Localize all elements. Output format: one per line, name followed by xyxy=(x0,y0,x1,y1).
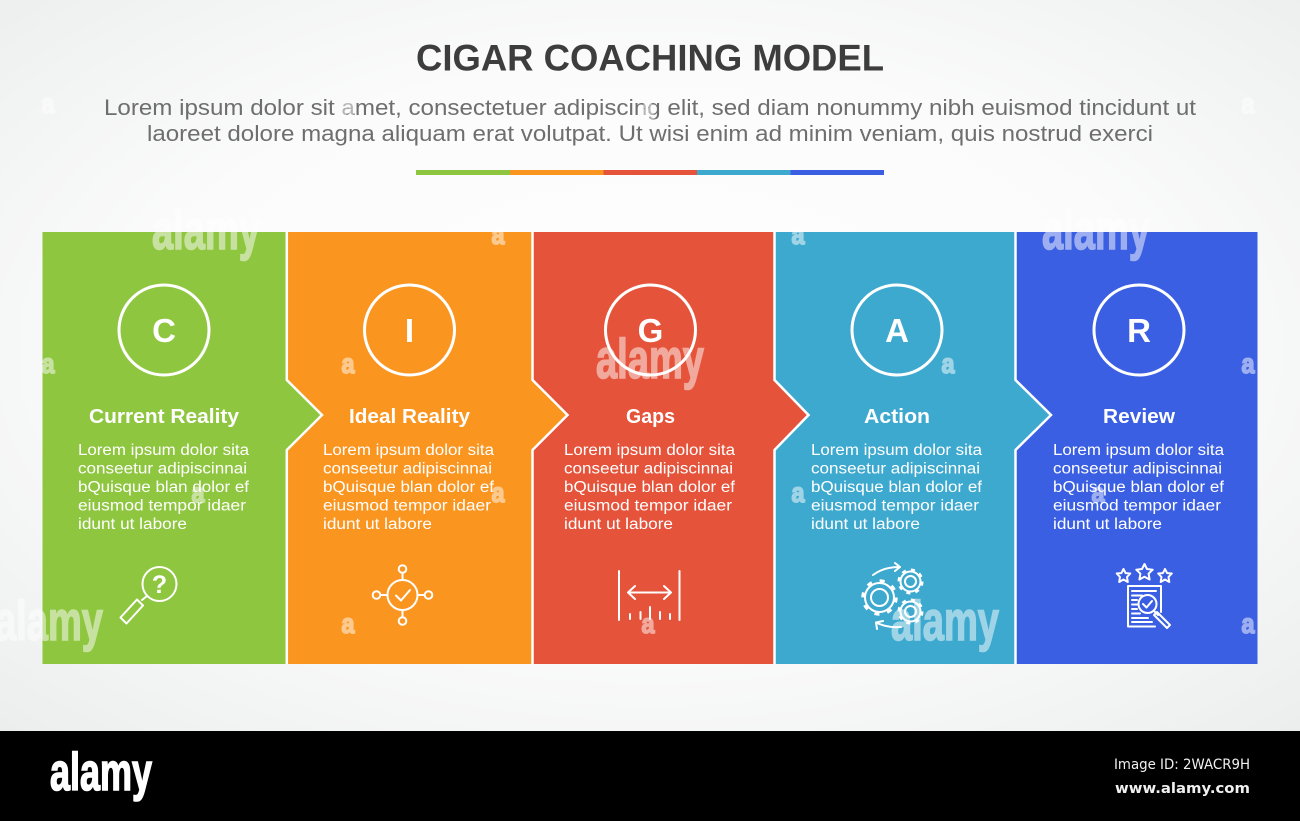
panel: ideal reality background xyxy=(287,232,568,664)
watermark: alamy overlays: alamy xyxy=(891,589,999,652)
letter R: R xyxy=(1127,312,1151,349)
panel content: review xyxy=(1053,285,1225,628)
body text: ideal reality: eiusmod tempor idaer xyxy=(323,498,491,514)
body text: review: Lorem ipsum dolor sita xyxy=(1053,442,1224,459)
letter I: I xyxy=(405,312,414,349)
heading: current reality: Current Reality xyxy=(89,406,240,428)
watermark: alamy overlays: a xyxy=(792,219,805,250)
watermark: alamy overlays: a xyxy=(642,608,655,639)
body text: action: Lorem ipsum dolor sita xyxy=(811,442,982,459)
footer logo: alamy xyxy=(50,743,152,802)
letter circle A xyxy=(852,285,942,375)
body text: current reality: bQuisque blan dolor ef xyxy=(78,479,250,496)
body text: current reality: conseetur adipiscinnai xyxy=(78,460,247,478)
title: CIGAR COACHING MODEL xyxy=(416,38,884,78)
heading: review: Review xyxy=(1103,406,1175,428)
panel: review background xyxy=(1016,232,1258,664)
watermark: alamy overlays: a xyxy=(42,88,55,119)
arrow outline: action xyxy=(1016,232,1051,664)
body text: ideal reality xyxy=(323,442,495,533)
subtitle text: Lorem ipsum dolor sit amet, consectetuer adipiscing elit, sed diam nonummy nibh euismod tincidunt ut xyxy=(104,95,1197,120)
body text: gaps: bQuisque blan dolor ef xyxy=(564,479,736,496)
icon: gears with cycle arrows xyxy=(863,563,922,629)
heading: action: Action xyxy=(864,406,930,428)
body text: review xyxy=(1053,442,1225,533)
letter circle C xyxy=(119,285,209,375)
body text: action: bQuisque blan dolor ef xyxy=(811,479,983,496)
watermark: alamy overlays: a xyxy=(1242,88,1255,119)
watermark: alamy overlays: alamy xyxy=(1042,198,1150,261)
colored divider bar xyxy=(416,170,884,175)
watermark: alamy overlays: a xyxy=(342,348,355,379)
arrow outline: ideal reality xyxy=(532,232,568,664)
letter G: G xyxy=(638,312,663,349)
heading: gaps: Gaps xyxy=(626,406,675,428)
watermark: alamy overlays: alamy xyxy=(152,198,260,261)
body text: gaps xyxy=(564,442,736,533)
icon: gap measurement arrow xyxy=(619,571,680,620)
body text: current reality: idunt ut labore xyxy=(78,516,187,533)
watermark: alamy overlays: a xyxy=(642,93,655,124)
watermark: alamy overlays: a xyxy=(1242,348,1255,379)
body text: current reality: Lorem ipsum dolor sita xyxy=(78,442,249,459)
letter circle I xyxy=(364,285,454,375)
body text: gaps: Lorem ipsum dolor sita xyxy=(564,442,735,459)
body text: review: conseetur adipiscinnai xyxy=(1053,460,1222,478)
body text: review: bQuisque blan dolor ef xyxy=(1053,479,1225,496)
watermark: alamy overlays: a xyxy=(1242,608,1255,639)
subtitle text xyxy=(104,95,1197,146)
panel content: gaps xyxy=(564,285,736,620)
body text: review: eiusmod tempor idaer xyxy=(1053,498,1221,514)
body text: review: idunt ut labore xyxy=(1053,516,1162,533)
body text: ideal reality: conseetur adipiscinnai xyxy=(323,460,492,478)
body text: action xyxy=(811,442,983,533)
watermark: alamy overlays: a xyxy=(42,348,55,379)
watermark: alamy overlays: alamy xyxy=(596,327,704,390)
letter circle R xyxy=(1094,285,1184,375)
watermark: alamy overlays: a xyxy=(492,219,505,250)
panel: action background xyxy=(775,232,1051,664)
body text: action: conseetur adipiscinnai xyxy=(811,460,980,478)
watermark: alamy overlays: a xyxy=(342,608,355,639)
panel content: current reality xyxy=(78,285,250,624)
icon: document review with stars xyxy=(1117,564,1172,628)
panel: current reality background xyxy=(42,232,322,664)
panel content: ideal reality xyxy=(323,285,495,625)
body text: ideal reality: Lorem ipsum dolor sita xyxy=(323,442,494,459)
body text: current reality: eiusmod tempor idaer xyxy=(78,498,246,514)
letter circle G xyxy=(606,285,696,375)
icon: magnifier with question mark: ? xyxy=(152,571,167,599)
footer band xyxy=(0,731,1300,821)
footer image id: Image ID: 2WACR9H xyxy=(1114,757,1250,773)
watermark: alamy overlays: a xyxy=(492,477,505,508)
heading: ideal reality: Ideal Reality xyxy=(349,406,471,428)
footer website: www.alamy.com xyxy=(1115,781,1250,797)
watermark: alamy overlays: a xyxy=(1092,477,1105,508)
body text: gaps: conseetur adipiscinnai xyxy=(564,460,733,478)
body text: gaps: idunt ut labore xyxy=(564,516,673,533)
panel content: action xyxy=(811,285,983,629)
subtitle text: laoreet dolore magna aliquam erat volutpat. Ut wisi enim ad minim veniam, quis nostrud exerci xyxy=(147,121,1153,146)
body text: current reality xyxy=(78,442,250,533)
body text: action: idunt ut labore xyxy=(811,516,920,533)
body text: ideal reality: bQuisque blan dolor ef xyxy=(323,479,495,496)
arrow outline: current reality xyxy=(287,232,322,664)
arrow outline: gaps xyxy=(774,232,808,664)
panel: gaps background xyxy=(533,232,808,664)
body text: action: eiusmod tempor idaer xyxy=(811,498,979,514)
icon: magnifier with question mark xyxy=(120,567,176,624)
watermark: alamy overlays xyxy=(0,88,1255,652)
icon: hub with check mark xyxy=(373,565,432,625)
letter A: A xyxy=(885,312,909,349)
letter C: C xyxy=(152,312,176,349)
body text: ideal reality: idunt ut labore xyxy=(323,516,432,533)
body text: gaps: eiusmod tempor idaer xyxy=(564,498,732,514)
watermark: alamy overlays: a xyxy=(792,477,805,508)
watermark: alamy overlays: a xyxy=(342,93,355,124)
watermark: alamy overlays: a xyxy=(942,348,955,379)
watermark: alamy overlays: a xyxy=(192,477,205,508)
